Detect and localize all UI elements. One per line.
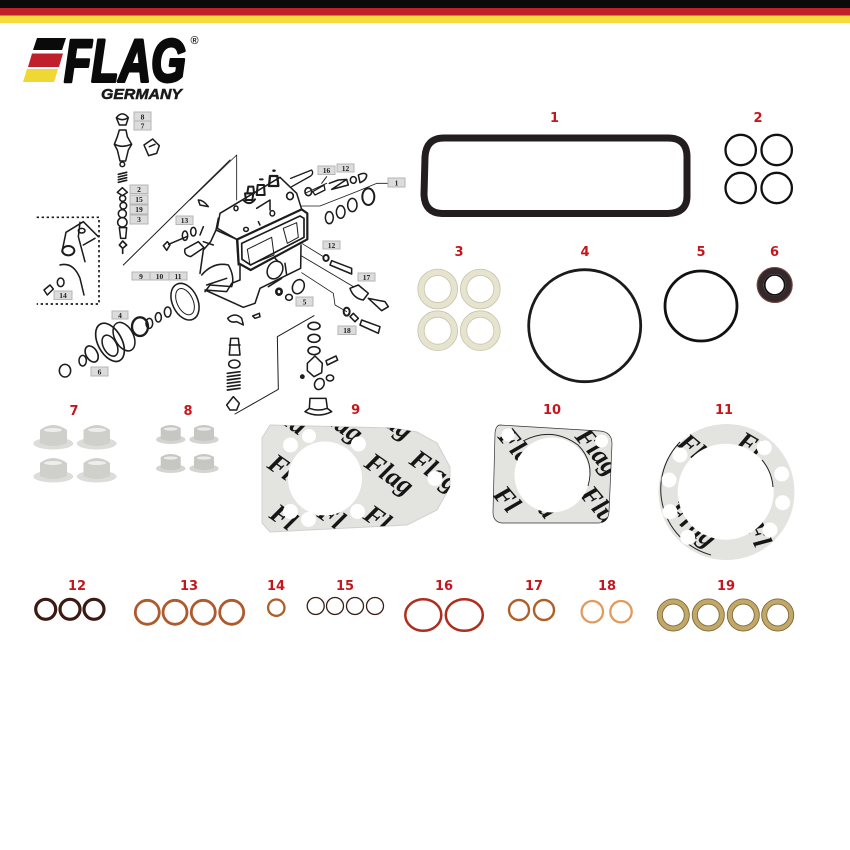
part 9: paper gasket: Flag <box>404 443 465 498</box>
part 17: copper rings <box>509 579 554 620</box>
part callout boxes: 2 <box>137 185 141 194</box>
logo: FLAG Germany: GERMANY <box>101 87 183 103</box>
logo: FLAG Germany: FLAG <box>64 28 186 94</box>
part 14: small copper ring <box>267 579 285 616</box>
part callout boxes: 9 <box>139 272 143 281</box>
part 5: medium o-ring: 5 <box>696 245 706 260</box>
part 9: paper gasket <box>262 404 450 532</box>
logo: FLAG Germany <box>23 28 199 103</box>
part callout boxes: 13 <box>181 216 188 225</box>
part 8: small nylon caps <box>156 404 219 473</box>
part 1: cover gasket <box>424 111 687 214</box>
part 10: paper gasket <box>492 404 612 524</box>
part callout boxes: 10 <box>156 272 164 281</box>
part callout boxes: 4 <box>118 311 122 320</box>
part 9: paper gasket: Flag <box>359 446 420 501</box>
part callout boxes: 11 <box>174 272 182 281</box>
part callout boxes: 3 <box>137 215 141 224</box>
part 19: brass washers: 19 <box>717 579 735 594</box>
part 10: paper gasket: a <box>532 495 564 524</box>
part 16: red copper rings <box>405 579 483 631</box>
part 2: four o-rings: 2 <box>753 111 763 126</box>
part 11: round paper gasket: 11 <box>715 403 733 418</box>
part callout boxes: 7 <box>141 122 145 130</box>
part 10: paper gasket: Flag <box>569 421 626 481</box>
part 10: paper gasket: 10 <box>543 403 561 418</box>
part 11: round paper gasket: Fl <box>671 426 711 466</box>
part callout boxes <box>54 112 405 376</box>
part 9: paper gasket: la <box>279 404 313 441</box>
part 9: paper gasket: 9 <box>351 403 360 418</box>
part callout boxes: 12 <box>342 164 350 173</box>
part 7: large nylon caps <box>33 404 117 482</box>
part 3: four cream rings: 3 <box>454 245 464 260</box>
part 9: paper gasket: Fla <box>262 447 312 494</box>
part 6: shaft seal <box>757 245 792 302</box>
part 1: cover gasket: 1 <box>550 111 559 126</box>
part callout boxes: 6 <box>98 368 102 376</box>
part 10: paper gasket: Flu <box>574 479 623 530</box>
part 14: small copper ring: 14 <box>267 579 285 594</box>
part 11: round paper gasket: Fl <box>731 425 770 464</box>
part callout boxes: 17 <box>363 273 370 282</box>
part 9: paper gasket: Fl <box>312 496 351 536</box>
part 5: medium o-ring <box>665 245 737 341</box>
part 3: four cream rings <box>421 245 497 347</box>
part callout boxes: 14 <box>59 291 67 300</box>
part 17: copper rings: 17 <box>525 579 543 594</box>
header stripes <box>0 0 850 23</box>
part 13: copper rings: 13 <box>180 579 198 594</box>
part 11: round paper gasket: Frag <box>660 494 723 553</box>
part 4: large o-ring <box>529 245 641 382</box>
part callout boxes: 15 <box>135 195 143 204</box>
part 12: dark copper rings <box>36 579 104 619</box>
part callout boxes: 1 <box>395 178 399 188</box>
part callout boxes: 18 <box>343 326 351 335</box>
part 18: light copper rings: 18 <box>598 579 616 594</box>
logo: FLAG Germany: ® <box>190 35 199 47</box>
part callout boxes: 16 <box>323 166 330 175</box>
part 11: round paper gasket: Fl <box>739 515 778 552</box>
part 9: paper gasket: lag <box>324 404 369 449</box>
part 10: paper gasket: Flag <box>492 421 549 481</box>
part 10: paper gasket: Fl <box>487 479 527 519</box>
part 2: four o-rings <box>726 111 792 203</box>
part 18: light copper rings <box>582 579 632 622</box>
part callout boxes: 19 <box>135 205 143 214</box>
part 7: large nylon caps: 7 <box>69 404 79 419</box>
part 6: shaft seal: 6 <box>770 245 779 260</box>
part 19: brass washers <box>660 579 791 628</box>
diagram: pump body and lower valve parts <box>190 155 388 415</box>
part 15: thin dark rings <box>307 579 384 614</box>
part 15: thin dark rings: 15 <box>336 579 354 594</box>
part 12: dark copper rings: 12 <box>68 579 86 594</box>
part 9: paper gasket: lag <box>374 401 419 446</box>
exploded diagram of injection pump <box>37 112 405 415</box>
part callout boxes: 5 <box>303 298 307 306</box>
part 4: large o-ring: 4 <box>580 245 590 260</box>
part callout boxes: 12 <box>328 241 336 250</box>
part callout boxes: 8 <box>141 112 145 122</box>
part 13: copper rings <box>135 579 244 624</box>
diagram: left section with nozzle holder and drive flange <box>37 114 230 377</box>
part 16: red copper rings: 16 <box>435 579 453 594</box>
part 9: paper gasket: Fl <box>358 498 397 538</box>
part 8: small nylon caps: 8 <box>183 404 193 419</box>
part 11: round paper gasket <box>658 403 794 560</box>
part 9: paper gasket: Fl <box>264 497 303 537</box>
